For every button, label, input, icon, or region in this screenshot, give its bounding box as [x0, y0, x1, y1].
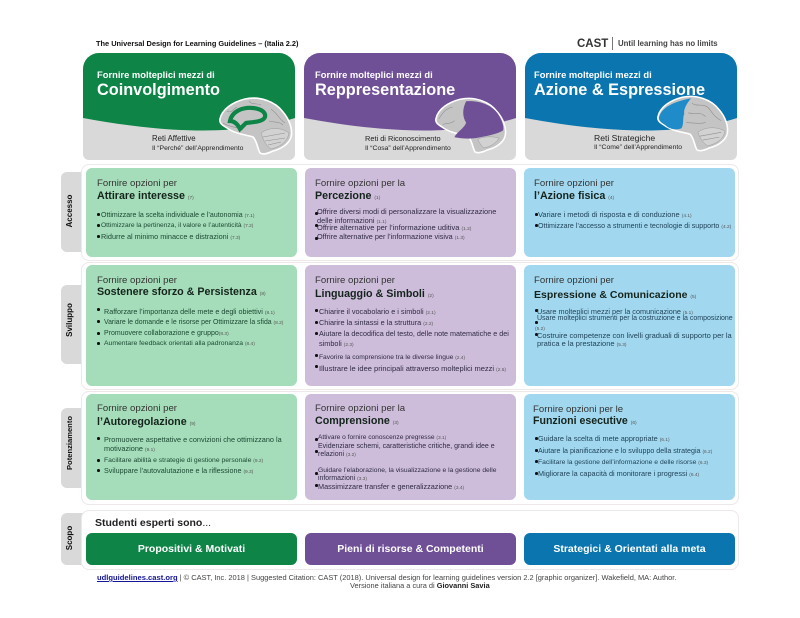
list: checkpoints 9: Sviluppare l’autovalutazione e la riflessione (9.3) — [104, 466, 253, 475]
heading: Reppresentazione: Reppresentazione — [315, 81, 455, 99]
list: checkpoints 8: Variare le domande e le risorse per Ottimizzare la sfida (8.2) — [104, 319, 283, 326]
list: checkpoints 3: Attivare o fornire conoscenze pregresse (3.1) — [318, 434, 446, 441]
panel: Azione & Espressione header — [525, 53, 737, 160]
icon: brain with recognition network — [435, 98, 506, 154]
panel: Attirare interesse — [86, 168, 297, 257]
text: Reti di Riconoscimento: Il “Cosa” dell’Apprendimento — [365, 145, 451, 152]
icon: brain with strategic network — [657, 96, 728, 152]
panel: Azione fisica — [524, 168, 735, 257]
panel: Coinvolgimento header — [83, 53, 295, 160]
heading: Coinvolgimento: Coinvolgimento — [97, 81, 220, 99]
panel: Funzioni esecutive — [524, 394, 735, 500]
side tab: Scopo — [61, 513, 87, 565]
list: checkpoints 9: Facilitare abilità e strategie di gestione personale (9.2) — [104, 457, 263, 464]
heading: Autoregolazione: l’Autoregolazione (9) — [97, 416, 196, 428]
document title: The Universal Design for Learning Guidelines – (Italia 2.2) — [96, 39, 298, 48]
list: checkpoints 9 — [97, 435, 282, 475]
panel: Percezione — [305, 168, 516, 257]
heading: Studenti esperti sono: Studenti esperti sono... — [95, 517, 211, 529]
list: checkpoints 6: Aiutare la pianificazione e lo sviluppo della strategia (6.2) — [538, 447, 712, 455]
heading: Sostenere sforzo & Persistenza: Fornire opzioni per — [97, 275, 177, 286]
heading: Funzioni esecutive: Funzioni esecutive (6) — [533, 415, 637, 427]
goal bar: Strategici & Orientati alla meta — [524, 533, 735, 565]
text: Reti di Riconoscimento: Reti di Riconoscimento — [365, 134, 441, 143]
list: checkpoints 3 — [315, 434, 496, 491]
list: checkpoints 6: Facilitare la gestione dell’informazione e delle risorse (6.3) — [538, 459, 708, 466]
goal bar: Pieni di risorse & Competenti — [305, 533, 516, 565]
text: Reti Strategiche — [594, 133, 682, 151]
list: checkpoints 7 — [97, 212, 254, 241]
list: checkpoints 8 — [97, 307, 284, 347]
heading: Attirare interesse: Fornire opzioni per — [97, 178, 177, 189]
list: checkpoints 4: Ottimizzare l’accesso a strumenti e tecnologie di supporto (4.2) — [538, 222, 731, 230]
goal bar: Pieni di risorse & Competenti: Pieni di risorse & Competenti — [337, 543, 484, 555]
text: Reti Strategiche: Reti Strategiche — [594, 133, 655, 143]
footer citation — [97, 573, 676, 590]
heading: Linguaggio & Simboli: Linguaggio & Simboli (2) — [315, 288, 434, 300]
list: checkpoints 1: Offrire alternative per l’informazione uditiva (1.2) — [317, 223, 471, 232]
heading: Reppresentazione — [315, 69, 455, 99]
heading: Espressione & Comunicazione: Fornire opzioni per — [534, 275, 614, 286]
list: checkpoints 1: Offrire diversi modi di personalizzare la visualizzazione — [317, 207, 496, 216]
text: Reti Affettive: Il “Perché” dell’Apprendimento — [152, 145, 243, 152]
list: checkpoints 3: relazioni (3.2) — [318, 451, 356, 458]
list: checkpoints 8: Promuovere collaborazione e gruppo(8.3) — [104, 330, 229, 337]
heading: Comprensione: Comprensione (3) — [315, 415, 399, 427]
list: checkpoints 3: Evidenziare schemi, caratteristiche critiche, grandi idee e — [318, 443, 495, 450]
list: checkpoints 7: Ridurre al minimo minacce e distrazioni (7.3) — [101, 232, 240, 241]
list: checkpoints 5: (5.2) — [535, 327, 545, 332]
list: checkpoints 1 — [315, 207, 496, 241]
heading: Comprensione: Fornire opzioni per la — [315, 403, 405, 414]
heading: Attirare interesse — [97, 178, 194, 202]
list: checkpoints 8: Rafforzare l’importanza delle mete e degli obiettivi (8.1) — [104, 307, 275, 316]
goal bar: Strategici & Orientati alla meta: Strategici & Orientati alla meta — [553, 543, 706, 555]
list: checkpoints 3: informazioni (3.3) — [318, 475, 367, 482]
side tab: Accesso — [61, 172, 87, 252]
list: checkpoints 2: Illustrare le idee principali attraverso molteplici mezzi (2.5) — [319, 364, 506, 373]
side tab: Scopo: Scopo — [65, 526, 74, 550]
heading: Linguaggio & Simboli — [315, 275, 434, 300]
row band: Scopo — [81, 510, 739, 570]
heading: Azione & Espressione: Azione & Espressione — [534, 81, 705, 99]
list: checkpoints 3: Massimizzare transfer e generalizzazione (3.4) — [318, 482, 464, 491]
heading: Azione & Espressione: Fornire molteplici mezzi di — [534, 69, 652, 80]
list: checkpoints 9: Promuovere aspettative e convizioni che ottimizzano la — [104, 435, 282, 444]
heading: Autoregolazione: Fornire opzioni per — [97, 403, 177, 414]
list: checkpoints 2 — [315, 307, 509, 373]
heading: Attirare interesse: Attirare interesse (7) — [97, 190, 194, 202]
panel: Comprensione — [305, 394, 516, 500]
CAST logo and tagline — [577, 37, 718, 50]
list: checkpoints 5: pratica e la prestazione (5.3) — [537, 339, 627, 348]
side tab: Potenziamento — [61, 408, 87, 488]
heading: Linguaggio & Simboli: Fornire opzioni per — [315, 275, 395, 286]
panel: Linguaggio & Simboli — [305, 265, 516, 386]
list: checkpoints 2: Favorire la comprensione tra le diverse lingue (2.4) — [319, 354, 465, 361]
list: checkpoints 4: Variare i metodi di risposta e di conduzione (4.1) — [538, 210, 692, 219]
text: Reti Affettive: Reti Affettive — [152, 134, 196, 143]
side tab: Potenziamento: Potenziamento — [65, 416, 74, 470]
heading: Espressione & Comunicazione: Espressione & Comunicazione (5) — [534, 289, 696, 301]
list: checkpoints 6 — [535, 434, 712, 478]
side tab: Sviluppo — [61, 285, 87, 364]
row band: Sviluppo — [81, 262, 739, 390]
CAST logo and tagline: CAST — [577, 38, 608, 50]
heading: Autoregolazione — [97, 403, 196, 428]
text: Reti Strategiche: Il “Come” dell’Apprendimento — [594, 144, 682, 151]
heading: Azione & Espressione — [534, 69, 705, 99]
list: checkpoints 8: Aumentare feedback orientati alla padronanza (8.4) — [104, 340, 255, 347]
list: checkpoints 2: Chiarire il vocabolario e i simboli (2.1) — [319, 307, 436, 316]
text: Reti di Riconoscimento — [365, 134, 451, 152]
heading: Azione fisica: Fornire opzioni per — [534, 178, 614, 189]
row band: Accesso — [81, 164, 739, 261]
goal bar: Propositivi & Motivati — [86, 533, 297, 565]
footer citation: udlguidelines.cast.org | © CAST, Inc. 2018 | Suggested Citation: CAST (2018). Universal design for learning guidelines version 2.2 [graphic organizer]. Wakefield, MA: Author. — [97, 573, 676, 582]
heading: Funzioni esecutive: Fornire opzioni per le — [533, 404, 623, 415]
row band: Potenziamento — [81, 391, 739, 505]
CAST logo and tagline: Until learning has no limits — [618, 39, 718, 48]
heading: Coinvolgimento — [97, 69, 220, 99]
text: Reti Affettive — [152, 134, 244, 152]
panel: Reppresentazione header — [304, 53, 516, 160]
list: checkpoints 4 — [535, 210, 731, 230]
heading: Percezione: Fornire opzioni per la — [315, 178, 405, 189]
panel: Sostenere sforzo & Persistenza — [86, 265, 297, 386]
list: checkpoints 5: Costruire competenze con livelli graduali di supporto per la — [537, 331, 732, 340]
heading: Comprensione — [315, 403, 406, 427]
list: checkpoints 5: Usare molteplici strumenti per la costruzione e la composizione — [537, 315, 733, 322]
footer citation: Versione italiana a cura di Giovanni Savia — [350, 581, 490, 590]
list: checkpoints 6: Guidare la scelta di mete appropriate (6.1) — [538, 434, 670, 443]
list: checkpoints 1: delle informazioni (1.1) — [317, 216, 386, 225]
list: checkpoints 7: Ottimizzare la pertinenza, il valore e l’autenticità (7.2) — [101, 222, 253, 229]
heading: Azione fisica: l’Azione fisica (4) — [534, 190, 614, 202]
icon: brain with affective network — [219, 97, 292, 155]
panel: Espressione & Comunicazione — [524, 265, 735, 386]
heading: Reppresentazione: Fornire molteplici mezzi di — [315, 69, 433, 80]
list: checkpoints 2: Chiarire la sintassi e la struttura (2.2) — [319, 318, 433, 327]
heading: Coinvolgimento: Fornire molteplici mezzi di — [97, 69, 215, 80]
list: checkpoints 6: Migliorare la capacità di monitorare i progressi (6.4) — [538, 469, 699, 478]
side tab: Sviluppo: Sviluppo — [65, 303, 74, 337]
heading: Sostenere sforzo & Persistenza — [97, 275, 266, 298]
heading: Percezione: Percezione (1) — [315, 190, 380, 202]
heading: Espressione & Comunicazione — [534, 275, 696, 301]
heading: Funzioni esecutive — [533, 404, 637, 427]
list: checkpoints 9: motivazione (9.1) — [104, 444, 155, 453]
heading: Sostenere sforzo & Persistenza: Sostenere sforzo & Persistenza (8) — [97, 286, 266, 298]
list: checkpoints 5 — [535, 307, 733, 348]
list: checkpoints 3: Guidare l’elaborazione, la visualizzazione e la gestione delle — [318, 467, 496, 474]
list: checkpoints 7: Ottimizzare la scelta individuale e l’autonomia (7.1) — [101, 212, 254, 219]
list: checkpoints 1: Offrire alternative per l’informazione visiva (1.3) — [317, 232, 465, 241]
heading: Percezione — [315, 178, 406, 202]
list: checkpoints 2: Aiutare la decodifica del testo, delle note matematiche e dei — [319, 329, 509, 338]
list: checkpoints 5: Usare molteplici mezzi per la comunicazione (5.1) — [537, 307, 693, 316]
heading: Azione fisica — [534, 178, 614, 202]
side tab: Accesso: Accesso — [65, 195, 74, 227]
panel: Autoregolazione — [86, 394, 297, 500]
list: checkpoints 2: simboli (2.3) — [319, 339, 354, 348]
goal bar: Propositivi & Motivati: Propositivi & Motivati — [138, 543, 245, 555]
